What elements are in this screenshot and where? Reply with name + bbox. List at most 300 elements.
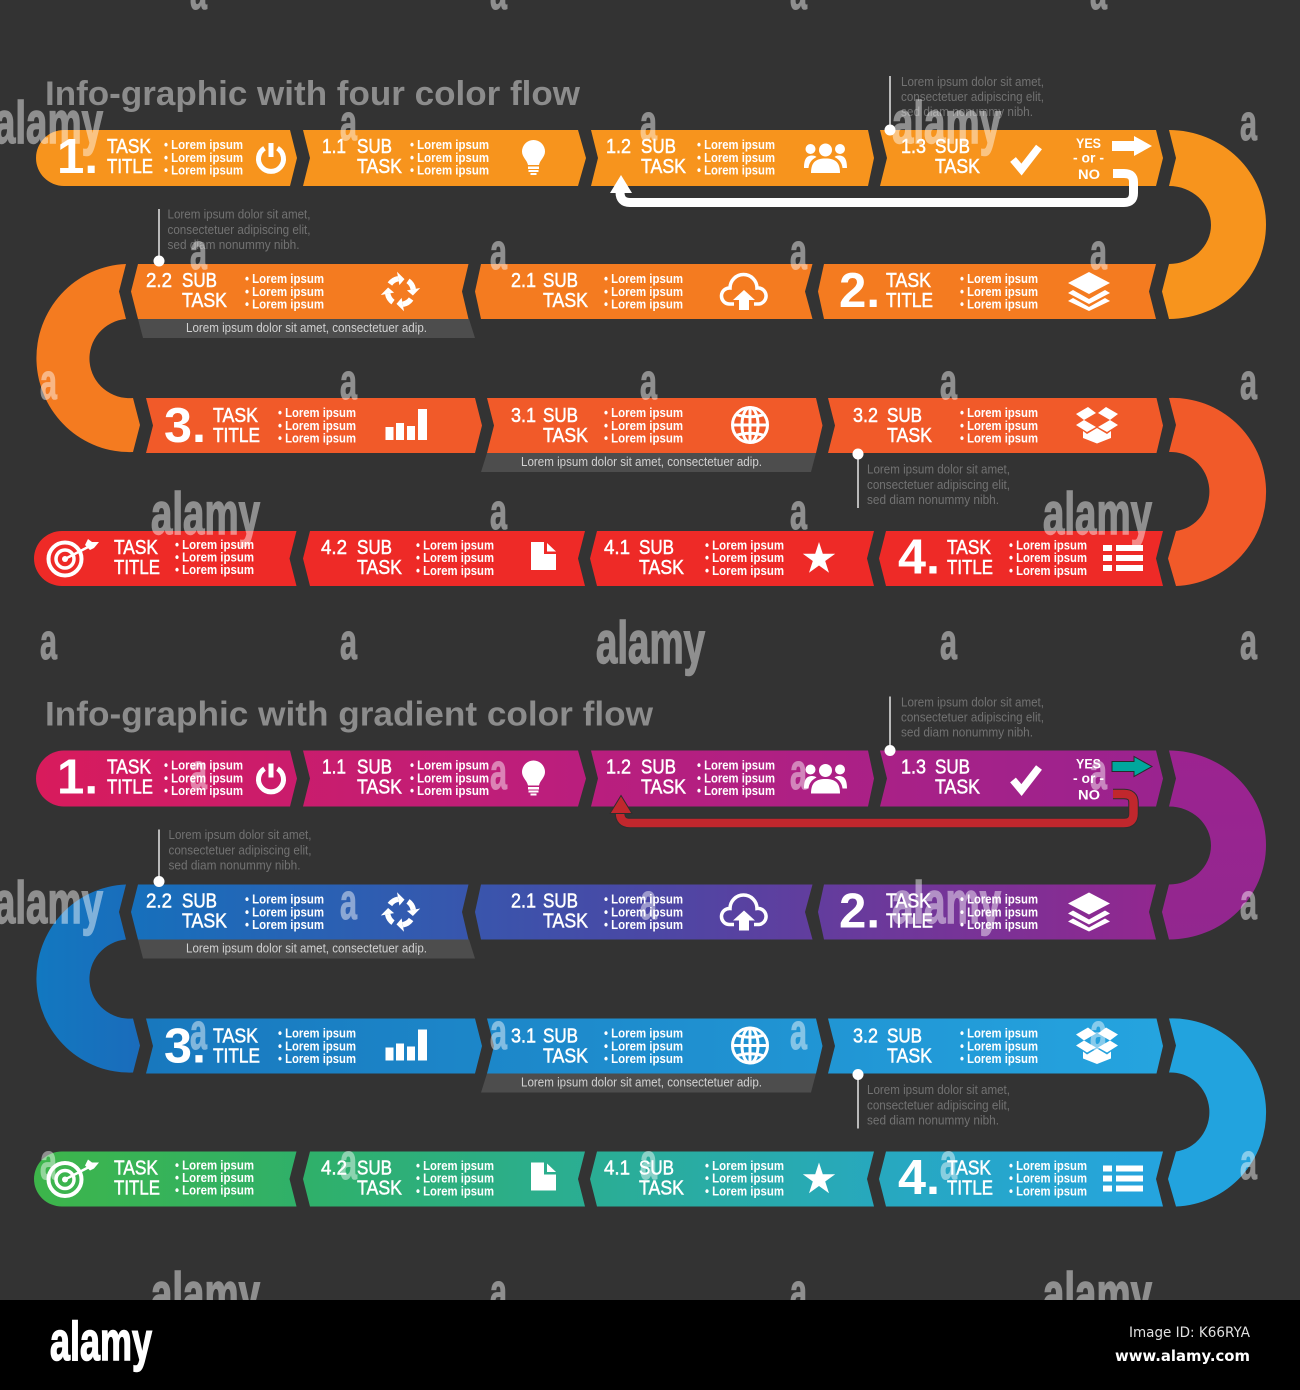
step 3.1: sub task: • Lorem ipsum	[604, 418, 683, 433]
step 1: task title: • Lorem ipsum	[164, 770, 243, 786]
step 4.1: sub task: 4.1	[604, 1158, 630, 1180]
step 4.2: sub task: TASK	[357, 557, 403, 579]
step 2: task title: • Lorem ipsum	[960, 284, 1038, 299]
step 2.1: sub task: SUB	[543, 270, 578, 292]
watermark overlay: a	[1090, 1003, 1107, 1060]
step 3.2: sub task: • Lorem ipsum	[960, 1051, 1038, 1066]
step 2: task title: 2.	[839, 264, 880, 318]
step 1: task title: TASK	[107, 756, 152, 778]
icon: cloud upload	[721, 274, 766, 310]
step 1: task title: • Lorem ipsum	[164, 758, 243, 772]
step 2.2: sub task: SUB	[182, 270, 217, 292]
step 4.1: sub task	[590, 531, 874, 586]
step 4: task title: TITLE	[947, 1178, 993, 1200]
icon: people	[804, 764, 847, 794]
icon: people	[804, 144, 847, 173]
step 1.2: sub task: • Lorem ipsum	[697, 150, 775, 165]
step 1: task title: TASK	[107, 136, 152, 158]
step 4.1: sub task: SUB	[639, 537, 674, 559]
callout: note above step 1.3: consectetuer adipiscing elit,	[901, 90, 1044, 104]
final step: task title: • Lorem ipsum	[175, 537, 254, 552]
step 3.2: sub task: • Lorem ipsum	[960, 430, 1038, 446]
final step: task title: • Lorem ipsum	[175, 562, 254, 577]
step 1.1: sub task: SUB	[357, 136, 392, 158]
icon: cycle arrows	[381, 272, 420, 311]
step 4.1: sub task: TASK	[639, 1178, 685, 1200]
step 2: task title: TITLE	[886, 910, 933, 932]
step 1.2: sub task	[591, 750, 874, 806]
step 2.1: sub task: • Lorem ipsum	[604, 892, 683, 906]
watermark overlay: a	[340, 94, 357, 151]
step 3: task title: • Lorem ipsum	[278, 1038, 356, 1054]
arrow: no returns to step 1.2	[610, 174, 1134, 202]
icon: target	[48, 1160, 99, 1196]
step 4.1: sub task	[590, 1152, 874, 1206]
step 4.2: sub task: • Lorem ipsum	[416, 538, 494, 552]
step 3.2: sub task: • Lorem ipsum	[960, 418, 1038, 433]
step 4.1: sub task: • Lorem ipsum	[705, 550, 784, 565]
step 2: task title: TASK	[886, 270, 932, 292]
step 2.2: sub task: • Lorem ipsum	[245, 917, 324, 932]
step 4.1: sub task: • Lorem ipsum	[705, 1158, 784, 1173]
callout: note above step 2.2: consectetuer adipiscing elit,	[168, 223, 310, 237]
watermark overlay: alamy	[151, 1261, 260, 1327]
icon: list	[1103, 545, 1143, 571]
watermark overlay: alamy	[596, 610, 705, 676]
callout: note above step 1.3: sed diam nonummy nibh.	[901, 726, 1033, 740]
callout: note below step 3.2: sed diam nonummy nibh.	[867, 1114, 999, 1128]
callout: note above step 2.2: sed diam nonummy nibh.	[168, 238, 300, 252]
step 3.1: sub task	[487, 398, 822, 453]
step 1.1: sub task: • Lorem ipsum	[410, 783, 489, 798]
step 4: task title: • Lorem ipsum	[1009, 550, 1087, 565]
callout: note above step 2.2: Lorem ipsum dolor sit amet,	[168, 828, 312, 842]
watermark overlay: a	[1090, 743, 1107, 800]
step 1.1: sub task: 1.1	[322, 756, 346, 778]
watermark overlay: a	[1240, 1133, 1257, 1190]
final step: task title: TASK	[114, 537, 159, 559]
step 4: task title: TITLE	[947, 557, 993, 579]
icon: check mark	[1013, 147, 1039, 170]
step 2.2: sub task: 2.2	[146, 890, 172, 912]
final step: task title: TITLE	[114, 557, 160, 579]
watermark overlay: a	[490, 223, 507, 280]
watermark overlay: a	[640, 1133, 657, 1190]
caption band under step 2.2	[138, 940, 475, 958]
step 4.1: sub task: SUB	[639, 1158, 674, 1180]
step 4: task title: • Lorem ipsum	[1009, 563, 1087, 578]
step 3.1: sub task: TASK	[543, 425, 589, 447]
step 3.2: sub task	[828, 398, 1163, 453]
watermark overlay: a	[340, 353, 357, 410]
step 1.1: sub task: TASK	[357, 776, 403, 798]
step 3.2: sub task: TASK	[887, 425, 933, 447]
step 3.2: sub task: 3.2	[853, 1026, 878, 1048]
callout: note below step 3.2: consectetuer adipiscing elit,	[867, 478, 1010, 492]
caption band under step 3.1: Lorem ipsum dolor sit amet, consectetuer adip.	[521, 1076, 762, 1090]
website: www.alamy.com	[1115, 1347, 1250, 1365]
icon: document	[531, 1162, 556, 1190]
step 3: task title	[146, 398, 482, 453]
callout: note above step 1.3	[884, 696, 1044, 756]
icon: open box	[1076, 1028, 1118, 1064]
step 2.2: sub task: 2.2	[146, 270, 172, 292]
step 1.2: sub task: • Lorem ipsum	[697, 783, 775, 798]
step 4: task title: • Lorem ipsum	[1009, 1184, 1087, 1198]
callout: note below step 3.2: sed diam nonummy nibh.	[867, 493, 999, 507]
step 2.2: sub task: • Lorem ipsum	[245, 284, 324, 299]
icon: document	[531, 542, 556, 570]
watermark overlay: a	[190, 743, 207, 800]
step 3.1: sub task: • Lorem ipsum	[604, 1026, 683, 1040]
step 1.1: sub task	[303, 130, 586, 186]
decision label: yes or no: YES	[1076, 135, 1101, 151]
step 3.2: sub task: SUB	[887, 405, 922, 427]
step 3: task title: 3.	[164, 399, 206, 453]
step 4.1: sub task: • Lorem ipsum	[705, 1184, 784, 1198]
heading: gradient color flow: Info-graphic with gradient color flow	[45, 696, 654, 734]
step 2: task title	[818, 264, 1156, 319]
connector arc: row 2 to row 3	[36, 264, 140, 452]
step 1.1: sub task: TASK	[357, 156, 403, 178]
icon: bar chart	[386, 1030, 427, 1060]
step 1.3: sub task	[880, 130, 1163, 186]
step 1.2: sub task: • Lorem ipsum	[697, 770, 775, 786]
watermark overlay: a	[640, 353, 657, 410]
watermark overlay: a	[1090, 223, 1107, 280]
connector arc: row 3 to row 4	[1168, 398, 1266, 586]
icon: target	[48, 539, 99, 576]
step 1.2: sub task: TASK	[641, 156, 687, 178]
step 4.1: sub task: • Lorem ipsum	[705, 563, 784, 578]
step 2: task title: • Lorem ipsum	[960, 296, 1038, 312]
final step: task title: • Lorem ipsum	[175, 1182, 254, 1198]
step 2: task title: • Lorem ipsum	[960, 271, 1038, 286]
step 3.1: sub task: • Lorem ipsum	[604, 1051, 683, 1066]
connector arc: row 1 to row 2	[1162, 130, 1266, 319]
watermark overlay: a	[940, 1133, 957, 1190]
step 1.1: sub task: • Lorem ipsum	[410, 150, 489, 165]
step 3: task title: TASK	[213, 405, 259, 427]
icon: globe	[732, 408, 768, 442]
watermark overlay: a	[190, 1003, 207, 1060]
step 4.2: sub task: 4.2	[321, 537, 347, 559]
step 4: task title: • Lorem ipsum	[1009, 538, 1087, 552]
step 4.2: sub task	[303, 531, 585, 586]
step 3.2: sub task: • Lorem ipsum	[960, 1026, 1038, 1040]
step 3: task title: • Lorem ipsum	[278, 418, 356, 433]
step 3.1: sub task: SUB	[543, 1026, 578, 1048]
step 4.1: sub task: 4.1	[604, 537, 630, 559]
step 3.1: sub task: • Lorem ipsum	[604, 1038, 683, 1054]
step 4.2: sub task: • Lorem ipsum	[416, 563, 494, 578]
watermark overlay: a	[790, 483, 807, 540]
connector arc: row 1 to row 2	[1162, 750, 1266, 940]
step 1.3: sub task: SUB	[935, 136, 970, 158]
step 2: task title: TASK	[886, 890, 932, 912]
watermark overlay: a	[940, 353, 957, 410]
heading: four color flow: Info-graphic with four color flow	[45, 75, 581, 113]
step 4.2: sub task: TASK	[357, 1178, 403, 1200]
callout: note above step 2.2	[154, 208, 310, 266]
callout: note below step 3.2	[852, 1069, 1010, 1128]
step 2.2: sub task: • Lorem ipsum	[245, 904, 324, 920]
callout: note above step 1.3	[884, 75, 1044, 136]
step 3.1: sub task: TASK	[543, 1046, 589, 1068]
watermark overlay: a	[940, 613, 957, 670]
step 1.2: sub task: • Lorem ipsum	[697, 758, 775, 772]
icon: power	[258, 764, 284, 792]
step 3.2: sub task	[828, 1018, 1163, 1074]
step 3: task title: TITLE	[213, 1046, 260, 1068]
step 3: task title: TASK	[213, 1026, 259, 1048]
decision label: yes or no: NO	[1078, 166, 1100, 182]
step 3.2: sub task: TASK	[887, 1046, 933, 1068]
step 1.1: sub task: • Lorem ipsum	[410, 162, 489, 178]
step 1.2: sub task: 1.2	[606, 136, 631, 158]
watermark overlay: alamy	[892, 90, 1001, 156]
step 3.1: sub task: SUB	[543, 405, 578, 427]
caption band under step 3.1	[481, 453, 816, 472]
icon: power	[258, 143, 284, 171]
step 1: task title: • Lorem ipsum	[164, 162, 243, 178]
arrow: no returns to step 1.2	[610, 794, 1134, 823]
callout: note above step 1.3: sed diam nonummy nibh.	[901, 105, 1033, 119]
step 2.1: sub task: • Lorem ipsum	[604, 904, 683, 920]
step 4: task title	[879, 530, 1163, 586]
step 1.1: sub task: • Lorem ipsum	[410, 758, 489, 772]
step 3.2: sub task: • Lorem ipsum	[960, 405, 1038, 420]
watermark overlay: a	[490, 743, 507, 800]
watermark overlay: a	[40, 353, 57, 410]
step 1.1: sub task: 1.1	[322, 136, 346, 158]
step 2.2: sub task: TASK	[182, 290, 228, 312]
step 1.2: sub task: SUB	[641, 756, 676, 778]
step 3.1: sub task: 3.1	[511, 1026, 536, 1048]
step 3.1: sub task: • Lorem ipsum	[604, 405, 683, 420]
watermark overlay: a	[40, 613, 57, 670]
step 2.2: sub task	[131, 264, 468, 319]
step 1.1: sub task: SUB	[357, 756, 392, 778]
caption band under step 2.2: Lorem ipsum dolor sit amet, consectetuer adip.	[186, 942, 427, 956]
step 2.1: sub task: 2.1	[511, 890, 536, 912]
decision label: yes or no: YES	[1076, 756, 1101, 772]
watermark overlay: a	[1240, 873, 1257, 930]
step 4.1: sub task: • Lorem ipsum	[705, 1170, 784, 1186]
panel: gradient color flow	[34, 696, 1266, 1206]
step 2: task title: • Lorem ipsum	[960, 892, 1038, 906]
final step: task title: • Lorem ipsum	[175, 550, 254, 564]
decision label: yes or no: NO	[1078, 786, 1100, 802]
connector arc: row 2 to row 3	[36, 884, 140, 1073]
step 3.2: sub task: SUB	[887, 1026, 922, 1048]
callout: note above step 2.2	[154, 828, 312, 887]
icon: light bulb	[522, 140, 545, 175]
decision label: yes or no: - or -	[1073, 150, 1104, 166]
step 1: task title: 1.	[57, 750, 98, 804]
step 4: task title: • Lorem ipsum	[1009, 1158, 1087, 1173]
decision label: yes or no	[1073, 135, 1104, 182]
step 4: task title: 4.	[898, 1151, 940, 1205]
callout: note above step 2.2: consectetuer adipiscing elit,	[168, 844, 312, 858]
step 2.1: sub task: • Lorem ipsum	[604, 296, 683, 312]
caption band under step 3.1: Lorem ipsum dolor sit amet, consectetuer adip.	[521, 455, 762, 469]
step 3: task title: • Lorem ipsum	[278, 405, 356, 420]
watermark overlay: a	[340, 873, 357, 930]
step 1.2: sub task	[591, 130, 874, 186]
watermark overlay: a	[490, 1263, 507, 1320]
decision label: yes or no: - or -	[1073, 770, 1104, 786]
step 3: task title: 3.	[164, 1020, 206, 1074]
icon: layers	[1068, 892, 1110, 932]
step 2.1: sub task: SUB	[543, 890, 578, 912]
icon: star	[803, 1162, 835, 1193]
step 2.1: sub task: TASK	[543, 290, 589, 312]
step 2.1: sub task: TASK	[543, 910, 589, 932]
step 2.2: sub task: • Lorem ipsum	[245, 892, 324, 906]
step 1.3: sub task	[880, 750, 1163, 806]
watermark overlay: a	[490, 1003, 507, 1060]
step 2.2: sub task: • Lorem ipsum	[245, 296, 324, 312]
icon: layers	[1068, 272, 1110, 311]
step 3: task title	[146, 1018, 482, 1074]
caption band under step 2.2: Lorem ipsum dolor sit amet, consectetuer adip.	[186, 321, 427, 335]
step 1.3: sub task: TASK	[935, 776, 981, 798]
step 3: task title: • Lorem ipsum	[278, 1026, 356, 1040]
step 2: task title: • Lorem ipsum	[960, 917, 1038, 932]
step 4.2: sub task: • Lorem ipsum	[416, 1158, 494, 1173]
step 4.1: sub task: • Lorem ipsum	[705, 538, 784, 552]
caption band under step 3.1	[481, 1074, 816, 1092]
watermark overlay: a	[1240, 353, 1257, 410]
step 2.1: sub task	[475, 264, 812, 319]
step 2.2: sub task: • Lorem ipsum	[245, 271, 324, 286]
step 4.2: sub task	[303, 1152, 585, 1206]
icon: cloud upload	[721, 895, 766, 930]
callout: note below step 3.2: Lorem ipsum dolor sit amet,	[867, 462, 1010, 476]
step 3.2: sub task: • Lorem ipsum	[960, 1038, 1038, 1054]
step 1: task title: 1.	[57, 130, 98, 184]
callout: note below step 3.2: consectetuer adipiscing elit,	[867, 1098, 1010, 1112]
step 4: task title: TASK	[947, 1158, 992, 1180]
step 1.2: sub task: • Lorem ipsum	[697, 162, 775, 178]
icon: bar chart	[386, 409, 427, 440]
step 3.1: sub task: • Lorem ipsum	[604, 430, 683, 446]
watermark overlay: a	[190, 223, 207, 280]
step 1.3: sub task: TASK	[935, 156, 981, 178]
step 2: task title: • Lorem ipsum	[960, 904, 1038, 920]
callout: note above step 1.3: consectetuer adipiscing elit,	[901, 710, 1044, 724]
step 4.1: sub task: TASK	[639, 557, 685, 579]
watermark overlay: a	[640, 873, 657, 930]
step 2: task title: TITLE	[886, 290, 933, 312]
step 1.1: sub task: • Lorem ipsum	[410, 770, 489, 786]
step 4.2: sub task: SUB	[357, 537, 392, 559]
step 2.1: sub task: 2.1	[511, 270, 536, 292]
watermark overlay: a	[790, 743, 807, 800]
final step: task title: TASK	[114, 1158, 159, 1180]
step 1.3: sub task: SUB	[935, 756, 970, 778]
watermark overlay: a	[790, 223, 807, 280]
final step: task title: TITLE	[114, 1178, 160, 1200]
step 4: task title: 4.	[898, 530, 940, 584]
watermark overlay: a	[1240, 613, 1257, 670]
watermark overlay: a	[1240, 94, 1257, 151]
watermark overlay: a	[340, 613, 357, 670]
watermark overlay: a	[40, 1133, 57, 1190]
step 1.1: sub task	[303, 750, 586, 806]
footer bar	[0, 1300, 1300, 1390]
step 4.2: sub task: 4.2	[321, 1158, 347, 1180]
footer logo: alamy	[50, 1310, 152, 1372]
decision label: yes or no	[1073, 756, 1104, 802]
step 2: task title	[818, 884, 1156, 940]
step 1: task title	[36, 750, 297, 806]
panel: four color flow	[34, 75, 1266, 586]
step 4: task title: • Lorem ipsum	[1009, 1170, 1087, 1186]
step 1: task title: • Lorem ipsum	[164, 137, 243, 152]
step 2.1: sub task	[475, 884, 812, 940]
step 1.3: sub task: 1.3	[901, 136, 926, 158]
step 1: task title: TITLE	[107, 776, 153, 798]
step 1: task title	[36, 130, 297, 186]
icon: star	[803, 542, 835, 573]
icon: open box	[1076, 407, 1118, 444]
step 2.2: sub task: SUB	[182, 890, 217, 912]
watermark overlay: alamy	[151, 481, 260, 547]
step 3.1: sub task: 3.1	[511, 405, 536, 427]
step 2.1: sub task: • Lorem ipsum	[604, 917, 683, 932]
step 4.2: sub task: • Lorem ipsum	[416, 550, 494, 565]
image id: Image ID: K66RYA	[1129, 1325, 1250, 1341]
step 4: task title: TASK	[947, 537, 992, 559]
watermark overlay: alamy	[1043, 1261, 1152, 1327]
watermark overlay: a	[340, 1133, 357, 1190]
watermark overlay: a	[490, 483, 507, 540]
callout: note above step 1.3: Lorem ipsum dolor sit amet,	[901, 75, 1044, 89]
watermark overlay: alamy	[1043, 481, 1152, 547]
step 1: task title: TITLE	[107, 156, 153, 178]
watermark overlay: a	[640, 94, 657, 151]
step 3: task title: TITLE	[213, 425, 260, 447]
step 2.2: sub task: TASK	[182, 910, 228, 932]
callout: note below step 3.2: Lorem ipsum dolor sit amet,	[867, 1083, 1010, 1097]
step 2: task title: 2.	[839, 884, 880, 938]
final step: task title	[34, 531, 297, 586]
step 4.2: sub task: • Lorem ipsum	[416, 1184, 494, 1198]
connector arc: row 3 to row 4	[1168, 1018, 1266, 1206]
callout: note above step 2.2: Lorem ipsum dolor sit amet,	[168, 208, 310, 222]
step 1.2: sub task: • Lorem ipsum	[697, 137, 775, 152]
step 1: task title: • Lorem ipsum	[164, 783, 243, 798]
arrow: yes forward	[1112, 756, 1152, 776]
icon: light bulb	[522, 760, 545, 796]
caption band under step 2.2	[138, 319, 475, 338]
icon: list	[1103, 1166, 1143, 1192]
icon: globe	[732, 1028, 768, 1063]
watermark overlay: a	[790, 1263, 807, 1320]
step 2.1: sub task: • Lorem ipsum	[604, 271, 683, 286]
step 3.2: sub task: 3.2	[853, 405, 878, 427]
watermark overlay: alamy	[892, 870, 1001, 936]
step 1.2: sub task: 1.2	[606, 756, 631, 778]
final step: task title: • Lorem ipsum	[175, 1170, 254, 1185]
step 2.2: sub task	[131, 884, 468, 940]
step 1: task title: • Lorem ipsum	[164, 150, 243, 165]
final step: task title: • Lorem ipsum	[175, 1158, 254, 1172]
watermark overlay: a	[790, 1003, 807, 1060]
step 4.2: sub task: • Lorem ipsum	[416, 1170, 494, 1186]
